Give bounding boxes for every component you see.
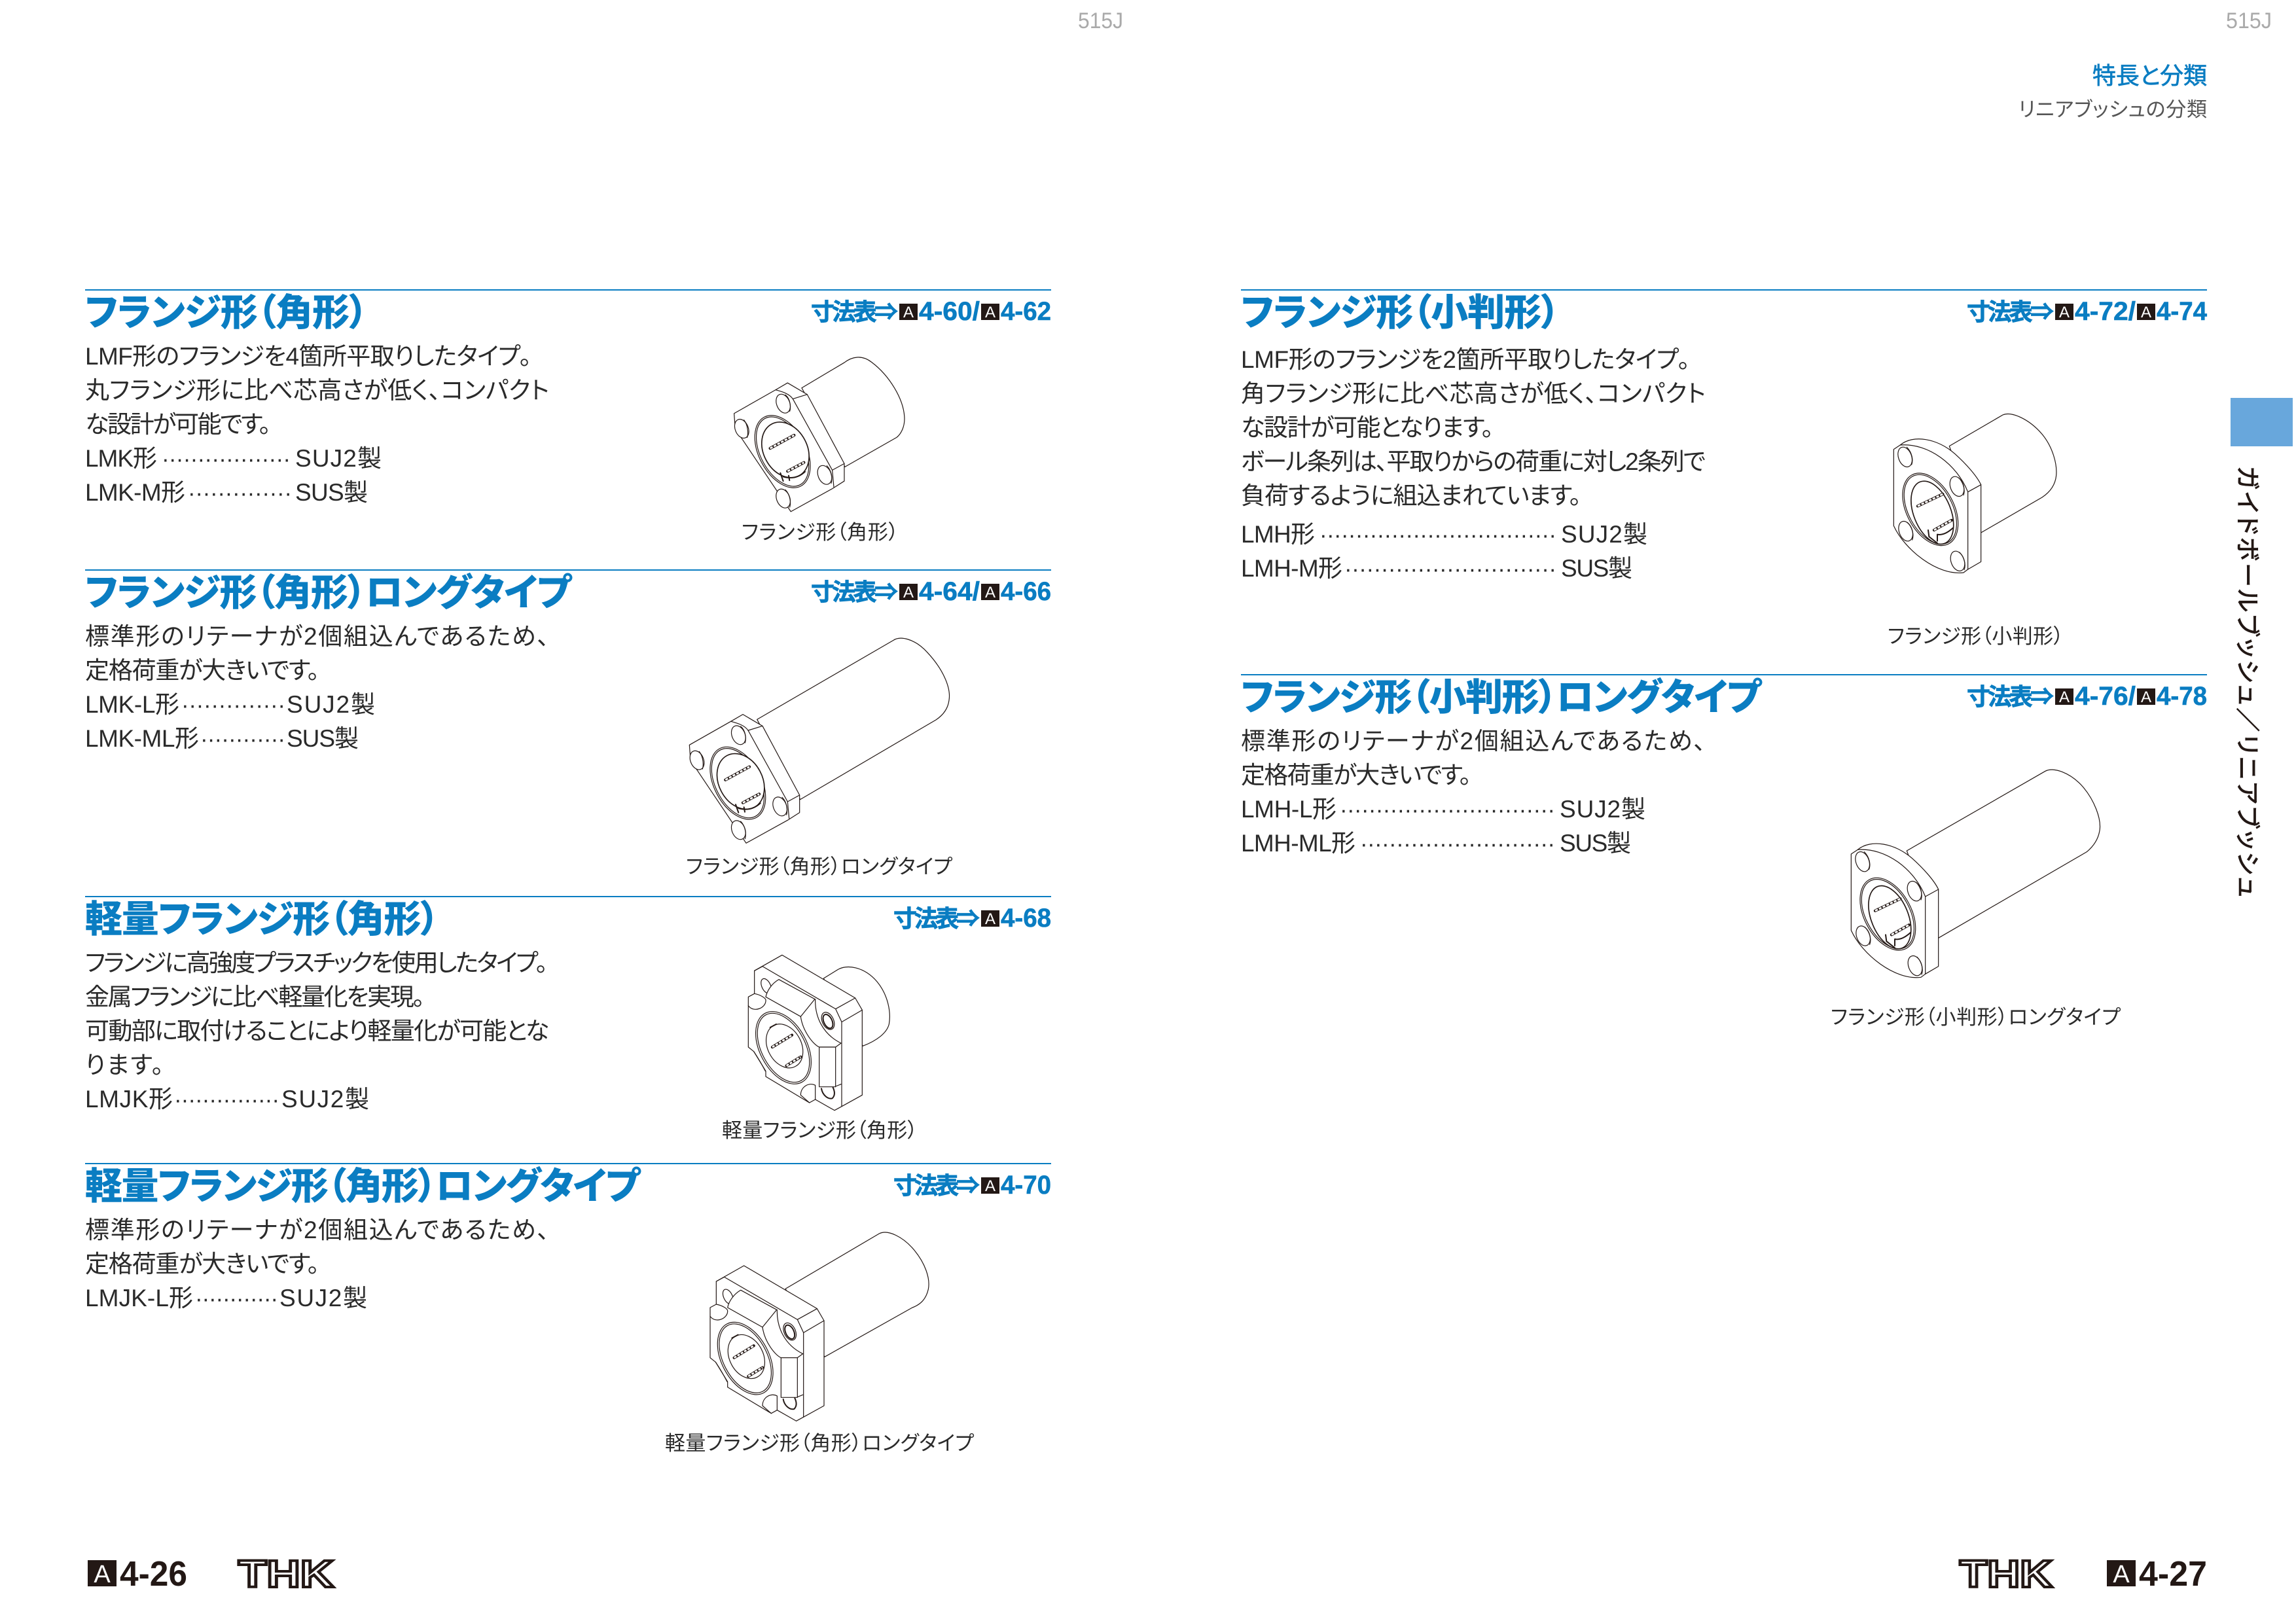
dimension table reference: 寸法表⇒ — [893, 905, 980, 932]
dimension table reference: 4-78 — [2157, 682, 2207, 711]
description text: 丸フランジ形に比べ芯高さが低く、コンパクト — [85, 377, 549, 404]
page number left: 4-26 — [120, 1554, 187, 1594]
dimension table reference: 4-66 — [1001, 577, 1051, 606]
illustration: flange square bushing — [732, 357, 905, 512]
description text: LMJK形 — [85, 1086, 173, 1113]
description text: 定格荷重が大きいです。 — [85, 1251, 319, 1277]
caption: 軽量フランジ形（角形） — [722, 1119, 918, 1142]
description text: LMF形のフランジを2箇所平取りしたタイプ。 — [1241, 346, 1690, 373]
description text: LMK-ML形 — [85, 725, 199, 752]
description text — [85, 343, 549, 506]
description text: SUJ2製 — [1561, 521, 1647, 548]
page number left — [88, 1554, 187, 1594]
THK logo left: THK — [238, 1553, 334, 1596]
illustration: light flange square bushing — [744, 955, 889, 1111]
description text — [85, 950, 549, 1113]
dimension table reference: 寸法表⇒ — [893, 1172, 980, 1199]
dimension table reference — [811, 297, 1051, 326]
description text: ·················· — [162, 446, 291, 472]
description text: LMH-L形 — [1241, 796, 1336, 823]
dimension table reference: A — [2141, 304, 2151, 321]
description text: LMH-ML形 — [1241, 830, 1355, 857]
illustration: long light flange square bushing — [706, 1232, 929, 1421]
THK logo right: THK — [1960, 1553, 2053, 1596]
caption: フランジ形（小判形） — [1888, 625, 2064, 648]
description text: LMK-L形 — [85, 691, 179, 718]
dimension table reference: 4-68 — [1001, 904, 1051, 933]
description text: ································· — [1319, 522, 1556, 548]
vertical chapter label: ガイドボールブッシュ／リニアブッシュ — [2234, 466, 2261, 897]
heading: フランジ形（小判形） — [1241, 292, 1560, 334]
description text: LMK-M形 — [85, 479, 185, 506]
description text: 標準形のリテーナが2個組込んであるため、 — [85, 623, 549, 650]
description text: 定格荷重が大きいです。 — [1241, 762, 1471, 789]
description text: LMJK-L形 — [85, 1285, 193, 1311]
description text: LMF形のフランジを4箇所平取りしたタイプ。 — [85, 343, 531, 370]
page number right — [2107, 1554, 2207, 1594]
description text: LMH-M形 — [1241, 555, 1342, 582]
panel: light flange square long — [85, 1163, 1051, 1455]
dimension table reference — [811, 577, 1051, 606]
dimension table reference — [1967, 682, 2207, 711]
caption: フランジ形（角形） — [742, 521, 899, 544]
dimension table reference: 寸法表⇒ — [1967, 298, 2054, 325]
page number right: 4-27 — [2139, 1554, 2207, 1594]
description text: SUJ2製 — [281, 1086, 369, 1113]
heading: フランジ形（角形）ロングタイプ — [85, 572, 573, 614]
dimension table reference: A — [2059, 304, 2070, 321]
dimension table reference: 4-72/ — [2075, 297, 2136, 326]
illustration: long flange square bushing — [687, 638, 950, 843]
dimension table reference: A — [985, 910, 996, 928]
dimension table reference: 寸法表⇒ — [811, 579, 898, 605]
dimension table reference: A — [903, 304, 914, 321]
description text: ··························· — [1360, 831, 1555, 857]
caption: フランジ形（小判形）ロングタイプ — [1831, 1006, 2121, 1029]
caption: 軽量フランジ形（角形）ロングタイプ — [665, 1432, 975, 1455]
section subtitle: リニアブッシュの分類 — [2018, 98, 2207, 121]
dimension table reference: A — [2141, 688, 2151, 706]
description text: 金属フランジに比べ軽量化を実現。 — [85, 984, 425, 1010]
description text — [1241, 346, 1706, 582]
description text: SUJ2製 — [295, 445, 382, 472]
description text: 角フランジ形に比べ芯高さが低く、コンパクト — [1241, 380, 1706, 407]
description text — [1241, 728, 1706, 857]
caption: フランジ形（角形）ロングタイプ — [686, 855, 953, 878]
description text: SUS製 — [287, 725, 359, 752]
heading: フランジ形（角形） — [85, 292, 368, 334]
dimension table reference — [893, 1171, 1051, 1200]
description text: LMK形 — [85, 445, 157, 472]
panel: flange oval — [1241, 289, 2208, 648]
description text: ············ — [195, 1286, 278, 1311]
heading: フランジ形（小判形）ロングタイプ — [1241, 677, 1763, 719]
description text: SUS製 — [1560, 830, 1631, 857]
description text: 定格荷重が大きいです。 — [85, 657, 319, 684]
page number right: A — [2113, 1561, 2130, 1588]
description text: な設計が可能となります。 — [1241, 414, 1494, 441]
description text: フランジに高強度プラスチックを使用したタイプ。 — [85, 950, 548, 976]
running code left: 515J — [1078, 9, 1123, 33]
description text: 標準形のリテーナが2個組込んであるため、 — [85, 1217, 549, 1243]
description text: ·············· — [188, 480, 292, 506]
dimension table reference: 4-74 — [2157, 297, 2208, 326]
description text: 可動部に取付けることにより軽量化が可能とな — [85, 1018, 549, 1044]
dimension table reference: A — [985, 584, 996, 601]
section title: 特長と分類 — [2092, 62, 2207, 89]
description text: SUJ2製 — [279, 1285, 367, 1311]
dimension table reference: A — [903, 584, 914, 601]
illustration: long flange oval bushing — [1849, 770, 2100, 978]
dimension table reference: 4-64/ — [919, 577, 980, 606]
description text: ります。 — [85, 1052, 164, 1079]
panel: flange square long — [85, 569, 1051, 878]
dimension table reference: A — [985, 1177, 996, 1195]
description text: ············ — [200, 726, 285, 752]
description text: 負荷するように組込まれています。 — [1241, 482, 1581, 509]
description text: な設計が可能です。 — [85, 411, 271, 438]
description text — [85, 623, 549, 752]
page number left: A — [94, 1561, 111, 1588]
dimension table reference: 4-60/ — [919, 297, 980, 326]
side tab — [2231, 398, 2293, 446]
description text: SUS製 — [1561, 555, 1632, 582]
description text: ····························· — [1344, 556, 1556, 582]
description text: SUS製 — [295, 479, 368, 506]
dimension table reference: A — [985, 304, 996, 321]
illustration: flange oval bushing — [1892, 414, 2056, 573]
description text: LMH形 — [1241, 521, 1315, 548]
dimension table reference: 4-76/ — [2075, 682, 2136, 711]
description text: ボール条列は、平取りからの荷重に対し2条列で — [1241, 448, 1706, 475]
panel: light flange square — [85, 896, 1051, 1142]
running code right: 515J — [2226, 9, 2272, 33]
dimension table reference — [1967, 297, 2208, 326]
description text: ··············· — [174, 1087, 279, 1113]
dimension table reference: A — [2059, 688, 2070, 706]
dimension table reference: 4-62 — [1001, 297, 1051, 326]
description text: 標準形のリテーナが2個組込んであるため、 — [1241, 728, 1706, 755]
description text: ······························ — [1340, 797, 1555, 823]
dimension table reference: 4-70 — [1001, 1171, 1051, 1200]
description text: SUJ2製 — [1560, 796, 1645, 823]
heading: 軽量フランジ形（角形）ロングタイプ — [85, 1166, 641, 1207]
panel: flange square — [85, 289, 1051, 544]
dimension table reference: 寸法表⇒ — [1967, 683, 2054, 710]
description text: SUJ2製 — [287, 691, 375, 718]
panel: flange oval long — [1241, 674, 2207, 1029]
heading: 軽量フランジ形（角形） — [85, 899, 439, 940]
dimension table reference — [893, 904, 1051, 933]
dimension table reference: 寸法表⇒ — [811, 298, 898, 325]
description text — [85, 1217, 549, 1311]
description text: ·············· — [181, 692, 285, 718]
